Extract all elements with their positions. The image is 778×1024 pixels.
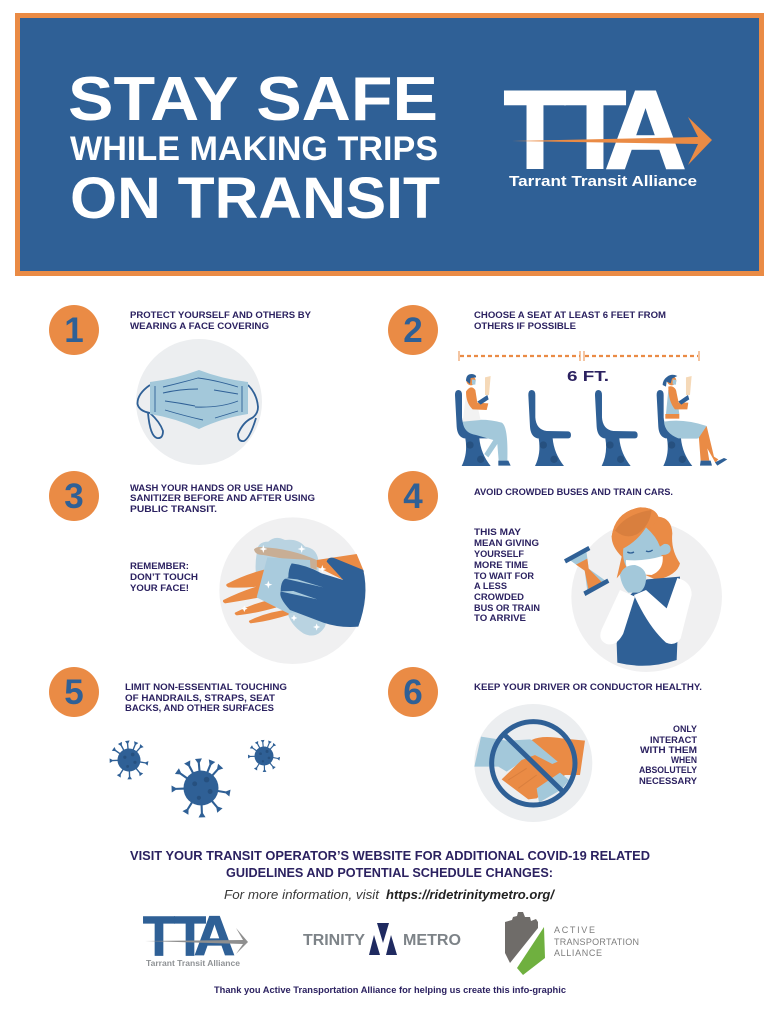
- panel 1: face covering: [49, 305, 312, 465]
- logo: Active Transportation Alliance: [505, 912, 639, 975]
- text: step 5: LIMIT NON-ESSENTIAL TOUCHING: [125, 682, 287, 692]
- panel 2: 6 feet seating: [388, 305, 727, 466]
- number 2: [388, 305, 438, 355]
- logo: Tarrant Transit Alliance: [504, 69, 712, 192]
- number 4: [388, 471, 438, 521]
- footer callout: [130, 849, 650, 880]
- panel 6: driver: [388, 667, 702, 822]
- text: only interact: INTERACT: [650, 735, 697, 745]
- icon: hand washing: [219, 517, 366, 664]
- title: STAY SAFE: [68, 65, 438, 134]
- text: step 1: [130, 310, 312, 331]
- text: step 4: AVOID CROWDED BUSES AND TRAIN CARS.: [474, 487, 673, 497]
- text: advice: BUS OR TRAIN: [474, 603, 540, 613]
- number 1: [49, 305, 99, 355]
- thank you note: Thank you Active Transportation Alliance for helping us create this info-graphic: [214, 985, 566, 995]
- logo: Active Transportation Alliance: ALLIANCE: [554, 948, 602, 958]
- logo: TTA small: [143, 904, 248, 968]
- text: only interact: ABSOLUTELY: [639, 765, 698, 775]
- text: step 3: [130, 483, 315, 514]
- text: remember: REMEMBER:: [130, 561, 189, 571]
- text: step 3: PUBLIC TRANSIT.: [130, 504, 217, 514]
- passenger right: [663, 375, 727, 466]
- text: step 3: WASH YOUR HANDS OR USE HAND: [130, 483, 293, 493]
- logo: Active Transportation Alliance: ACTIVE: [554, 925, 595, 935]
- text: step 2: [474, 310, 666, 331]
- number 3: 3: [64, 477, 84, 516]
- icon: face mask: [136, 339, 262, 465]
- logo: Trinity Metro: METRO: [403, 932, 461, 949]
- footer callout: GUIDELINES AND POTENTIAL SCHEDULE CHANGES:: [226, 866, 553, 880]
- logo: TTA small: T: [143, 904, 175, 967]
- panel 5: surfaces: [49, 667, 287, 818]
- distance marker: [459, 351, 699, 361]
- text: step 2: CHOOSE A SEAT AT LEAST 6 FEET FROM: [474, 310, 666, 320]
- text: advice: THIS MAY: [474, 527, 522, 537]
- passenger left: [463, 374, 511, 466]
- icon: waiting woman with hourglass: [564, 507, 722, 672]
- text: step 6: KEEP YOUR DRIVER OR CONDUCTOR HEALTHY.: [474, 682, 702, 692]
- header banner: [18, 16, 762, 274]
- number 5: [49, 667, 99, 717]
- number 3: [49, 471, 99, 521]
- logo: Tarrant Transit Alliance: A: [605, 69, 686, 192]
- logo: Tarrant Transit Alliance: T: [564, 69, 626, 192]
- number 5: 5: [64, 673, 84, 712]
- more information line: https://ridetrinitymetro.org/: [386, 887, 555, 902]
- text: advice: [474, 527, 540, 623]
- logo: TTA small: Tarrant Transit Alliance: [146, 958, 240, 968]
- title: WHILE MAKING TRIPS: [70, 130, 438, 168]
- text: only interact: WHEN: [671, 755, 697, 765]
- text: advice: YOURSELF: [474, 549, 524, 559]
- panel 3: wash hands: [49, 471, 366, 664]
- text: advice: MEAN GIVING: [474, 538, 539, 548]
- icon: virus large center: [171, 758, 231, 818]
- icon: virus small right: [248, 740, 280, 772]
- text: step 5: BACKS, AND OTHER SURFACES: [125, 703, 274, 713]
- text: only interact: WITH THEM: [640, 745, 697, 755]
- number 2: 2: [403, 311, 423, 350]
- text: only interact: ONLY: [673, 724, 698, 734]
- logo: TTA small: T: [174, 904, 206, 967]
- logo: Trinity Metro: [303, 923, 461, 955]
- text: remember: YOUR FACE!: [130, 583, 189, 593]
- number 6: [388, 667, 438, 717]
- text: step 3: SANITIZER BEFORE AND AFTER USING: [130, 493, 315, 503]
- label: 6 FT.: 6 FT.: [567, 368, 609, 385]
- text: only interact: [639, 724, 698, 786]
- logo: TTA small: A: [194, 904, 235, 967]
- number 1: 1: [64, 311, 84, 350]
- text: advice: A LESS: [474, 581, 507, 591]
- logo: Trinity Metro: TRINITY: [303, 932, 365, 949]
- seats and passengers illustration: [455, 374, 727, 466]
- text: advice: TO ARRIVE: [474, 613, 526, 623]
- text: step 5: [125, 682, 287, 713]
- text: advice: CROWDED: [474, 592, 524, 602]
- logo: Tarrant Transit Alliance: T: [504, 69, 566, 192]
- text: remember: [130, 561, 198, 593]
- text: advice: MORE TIME: [474, 560, 528, 570]
- text: remember: DON’T TOUCH: [130, 572, 198, 582]
- icon: no handshake: [474, 704, 592, 822]
- footer callout: VISIT YOUR TRANSIT OPERATOR’S WEBSITE FOR ADDITIONAL COVID-19 RELATED: [130, 849, 650, 863]
- panel 4: crowded vehicles: [388, 471, 722, 672]
- logo: Tarrant Transit Alliance: Tarrant Transit Alliance: [509, 173, 697, 190]
- icon: virus small left: [110, 741, 148, 779]
- number 4: 4: [403, 477, 423, 516]
- text: step 2: OTHERS IF POSSIBLE: [474, 321, 576, 331]
- text: step 1: PROTECT YOURSELF AND OTHERS BY: [130, 310, 312, 320]
- title: ON TRANSIT: [70, 166, 440, 231]
- text: step 5: OF HANDRAILS, STRAPS, SEAT: [125, 693, 275, 703]
- logo: Active Transportation Alliance: TRANSPORTATION: [554, 937, 639, 947]
- more information line: [224, 887, 555, 902]
- text: step 1: WEARING A FACE COVERING: [130, 321, 269, 331]
- text: only interact: NECESSARY: [639, 776, 698, 786]
- text: advice: TO WAIT FOR: [474, 571, 534, 581]
- number 6: 6: [403, 673, 423, 712]
- more information line: For more information, visit: [224, 887, 380, 902]
- title: [68, 65, 440, 231]
